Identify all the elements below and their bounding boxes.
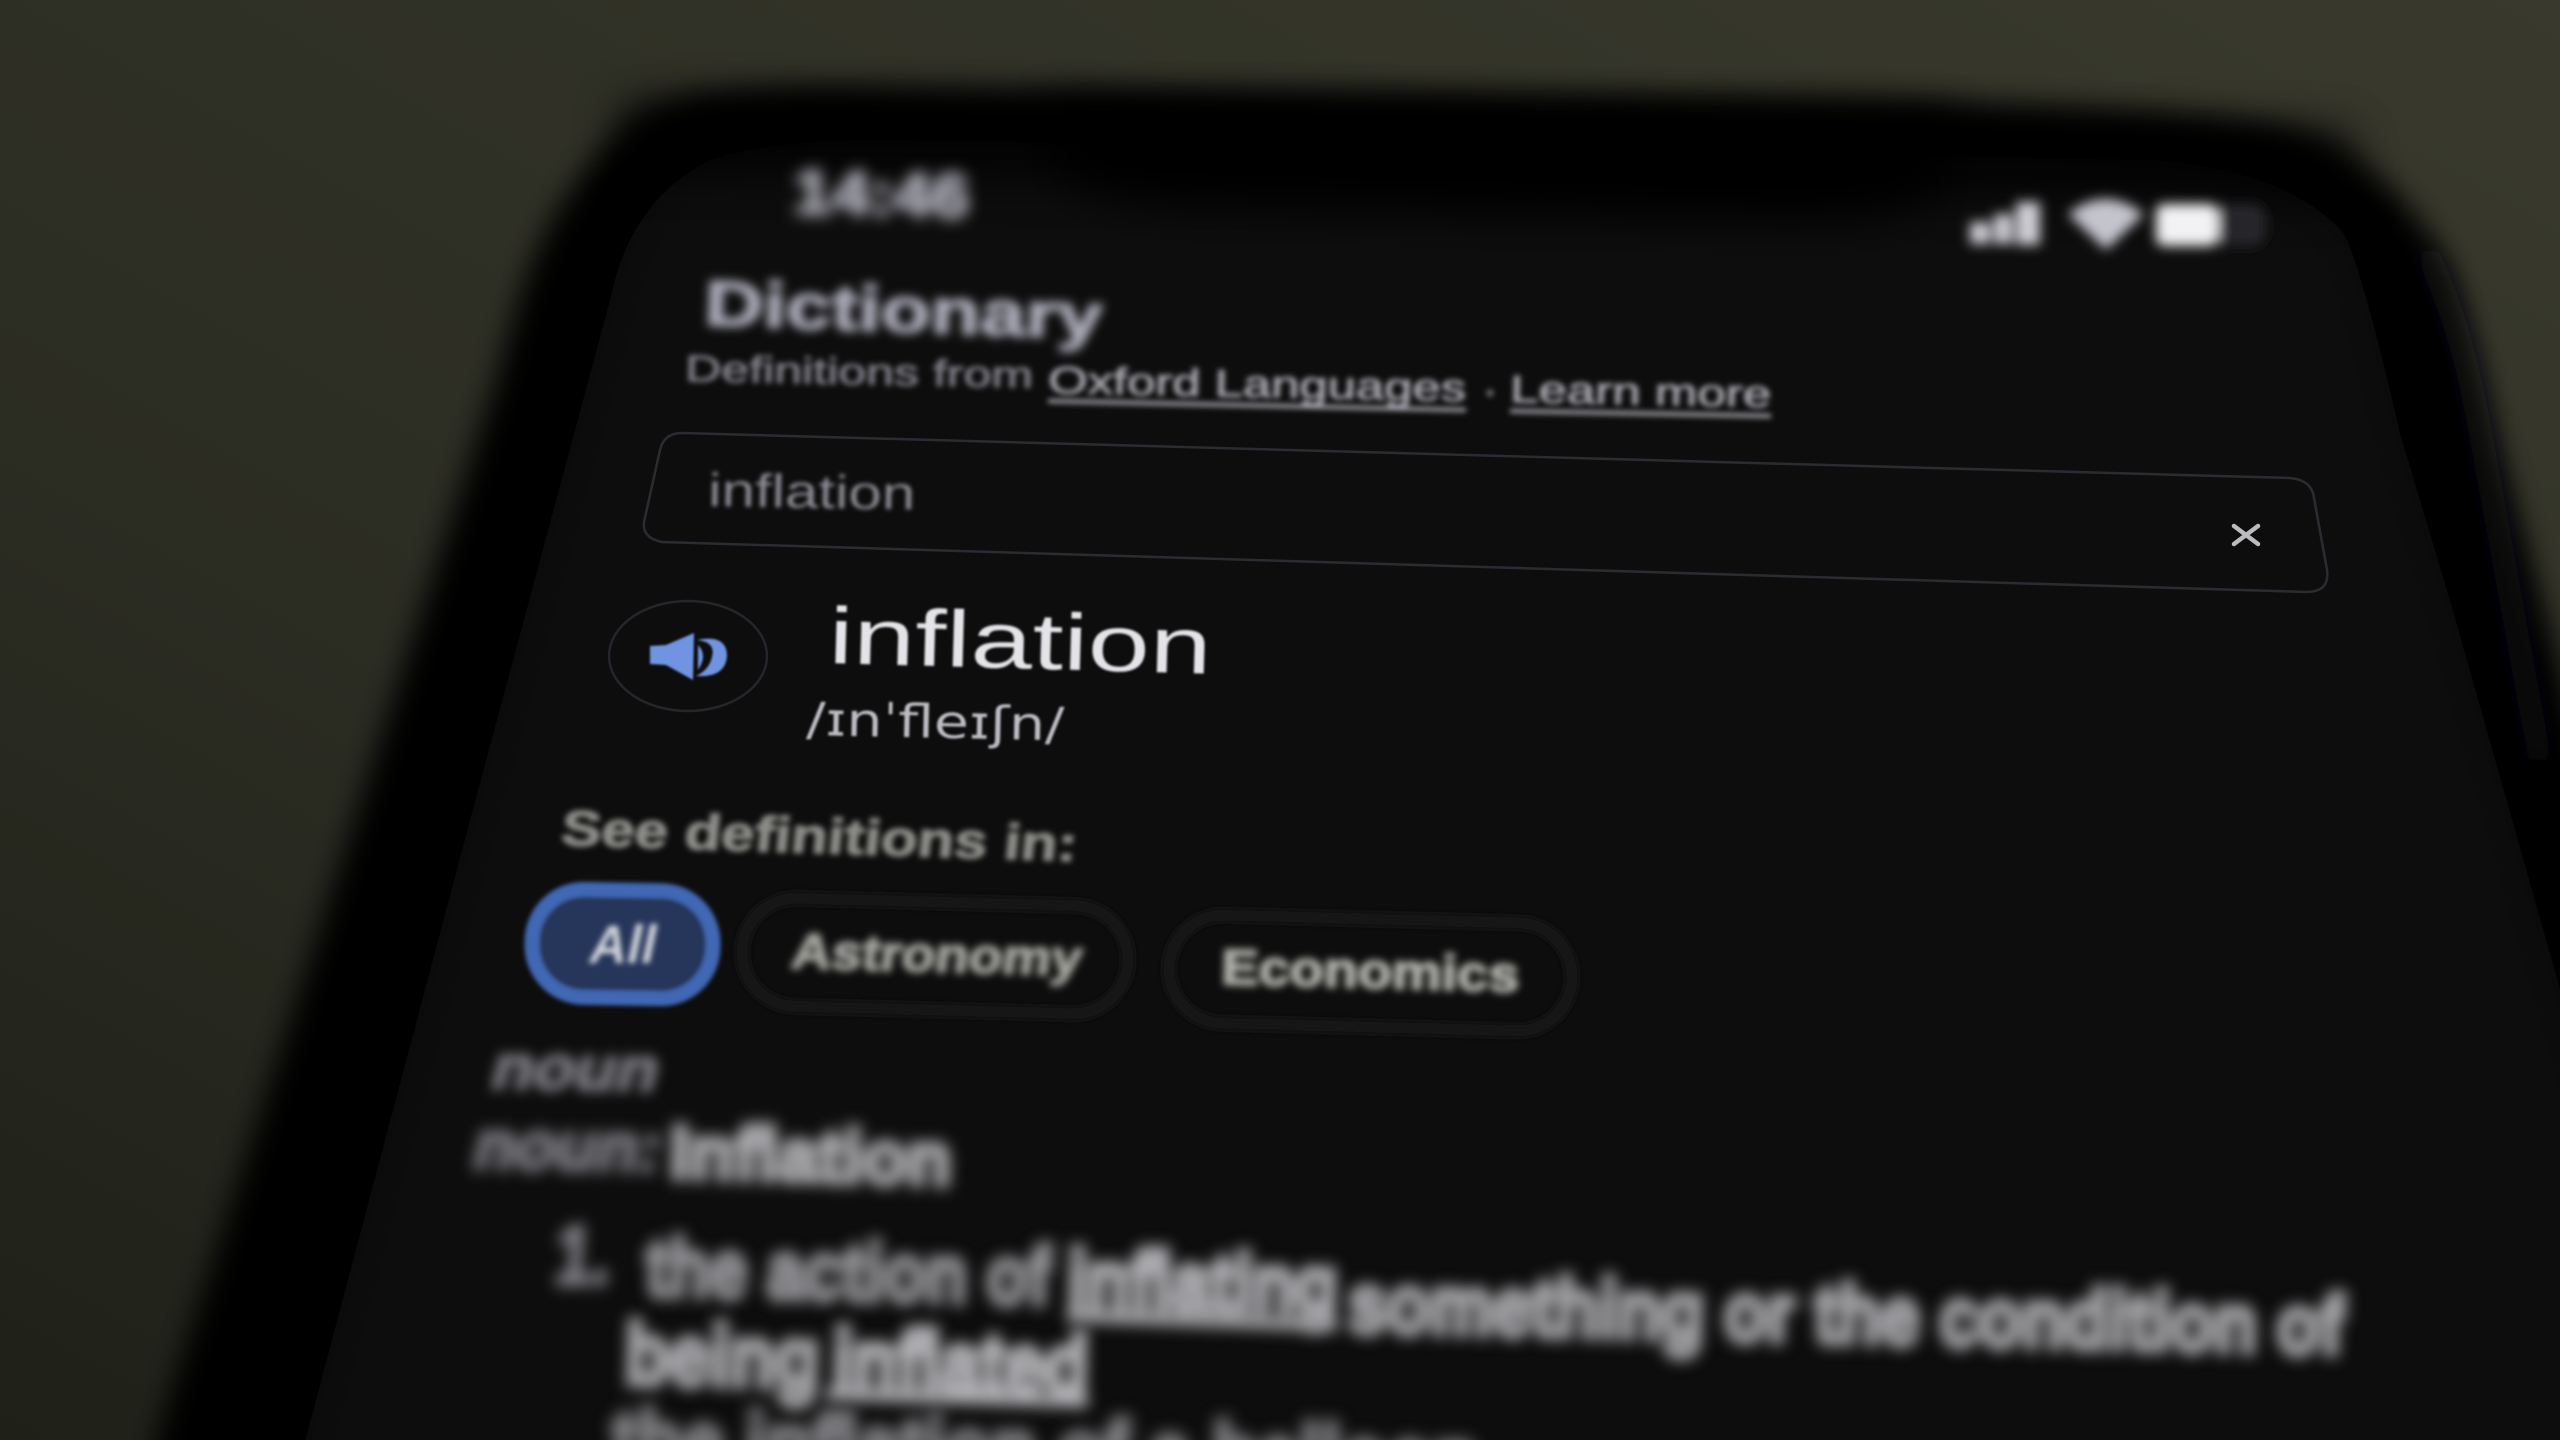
heading: Dictionary: Dictionary [704,267,1104,353]
chip: Economics: Economics [1221,939,1520,1003]
definition line 1: something or the condition of [1347,1256,2345,1373]
chip: All [531,888,714,1000]
icon: signal [1970,202,2040,245]
search text: inflation [708,463,916,520]
definition line 1: inflating [1067,1232,1339,1332]
icon: speaker [650,633,727,680]
chip: All: All [584,915,663,975]
text: Definitions from: Definitions from [685,348,1034,396]
box outline [644,433,2327,592]
icon: wifi [2068,199,2144,250]
link: Learn more: Learn more [1510,369,1772,416]
separator dot [1486,390,1494,396]
source line [685,348,1772,416]
side band highlight [2425,250,2540,760]
link: Oxford Languages: Oxford Languages [1048,360,1467,410]
button circle [609,601,767,711]
time: 14:46 [793,158,970,232]
headword: inflation [828,591,1213,691]
chip: Astronomy: Astronomy [789,923,1086,987]
top shade of screen [620,100,2360,200]
definition line 2: being [624,1304,821,1407]
chip: Astronomy [741,897,1129,1015]
definition line 2 [624,1304,1090,1415]
status bar [793,158,2266,250]
label: noun: noun: [467,1107,671,1186]
definition list [551,1208,2345,1440]
pronunciation button [609,601,767,711]
definition line 2: inflated [832,1310,1090,1415]
chip: Economics [1168,914,1573,1032]
word: Inflation: Inflation [669,1110,953,1202]
part of speech: noun: noun [484,1033,669,1105]
icon: battery [2156,204,2266,246]
entry: noun inflation [467,1107,953,1202]
filter chips [531,888,1573,1032]
label: See definitions in: See definitions in: [559,800,1080,872]
phone screen [300,140,2560,1440]
definition line 1: the action of [645,1220,1052,1323]
number: 1. [551,1208,616,1302]
definition line 1 [645,1220,2345,1373]
search box [644,433,2327,592]
icon: clear x [2234,526,2258,544]
notch [1040,105,1960,220]
pronunciation text: /ɪnˈfleɪʃn/ [806,692,1065,751]
